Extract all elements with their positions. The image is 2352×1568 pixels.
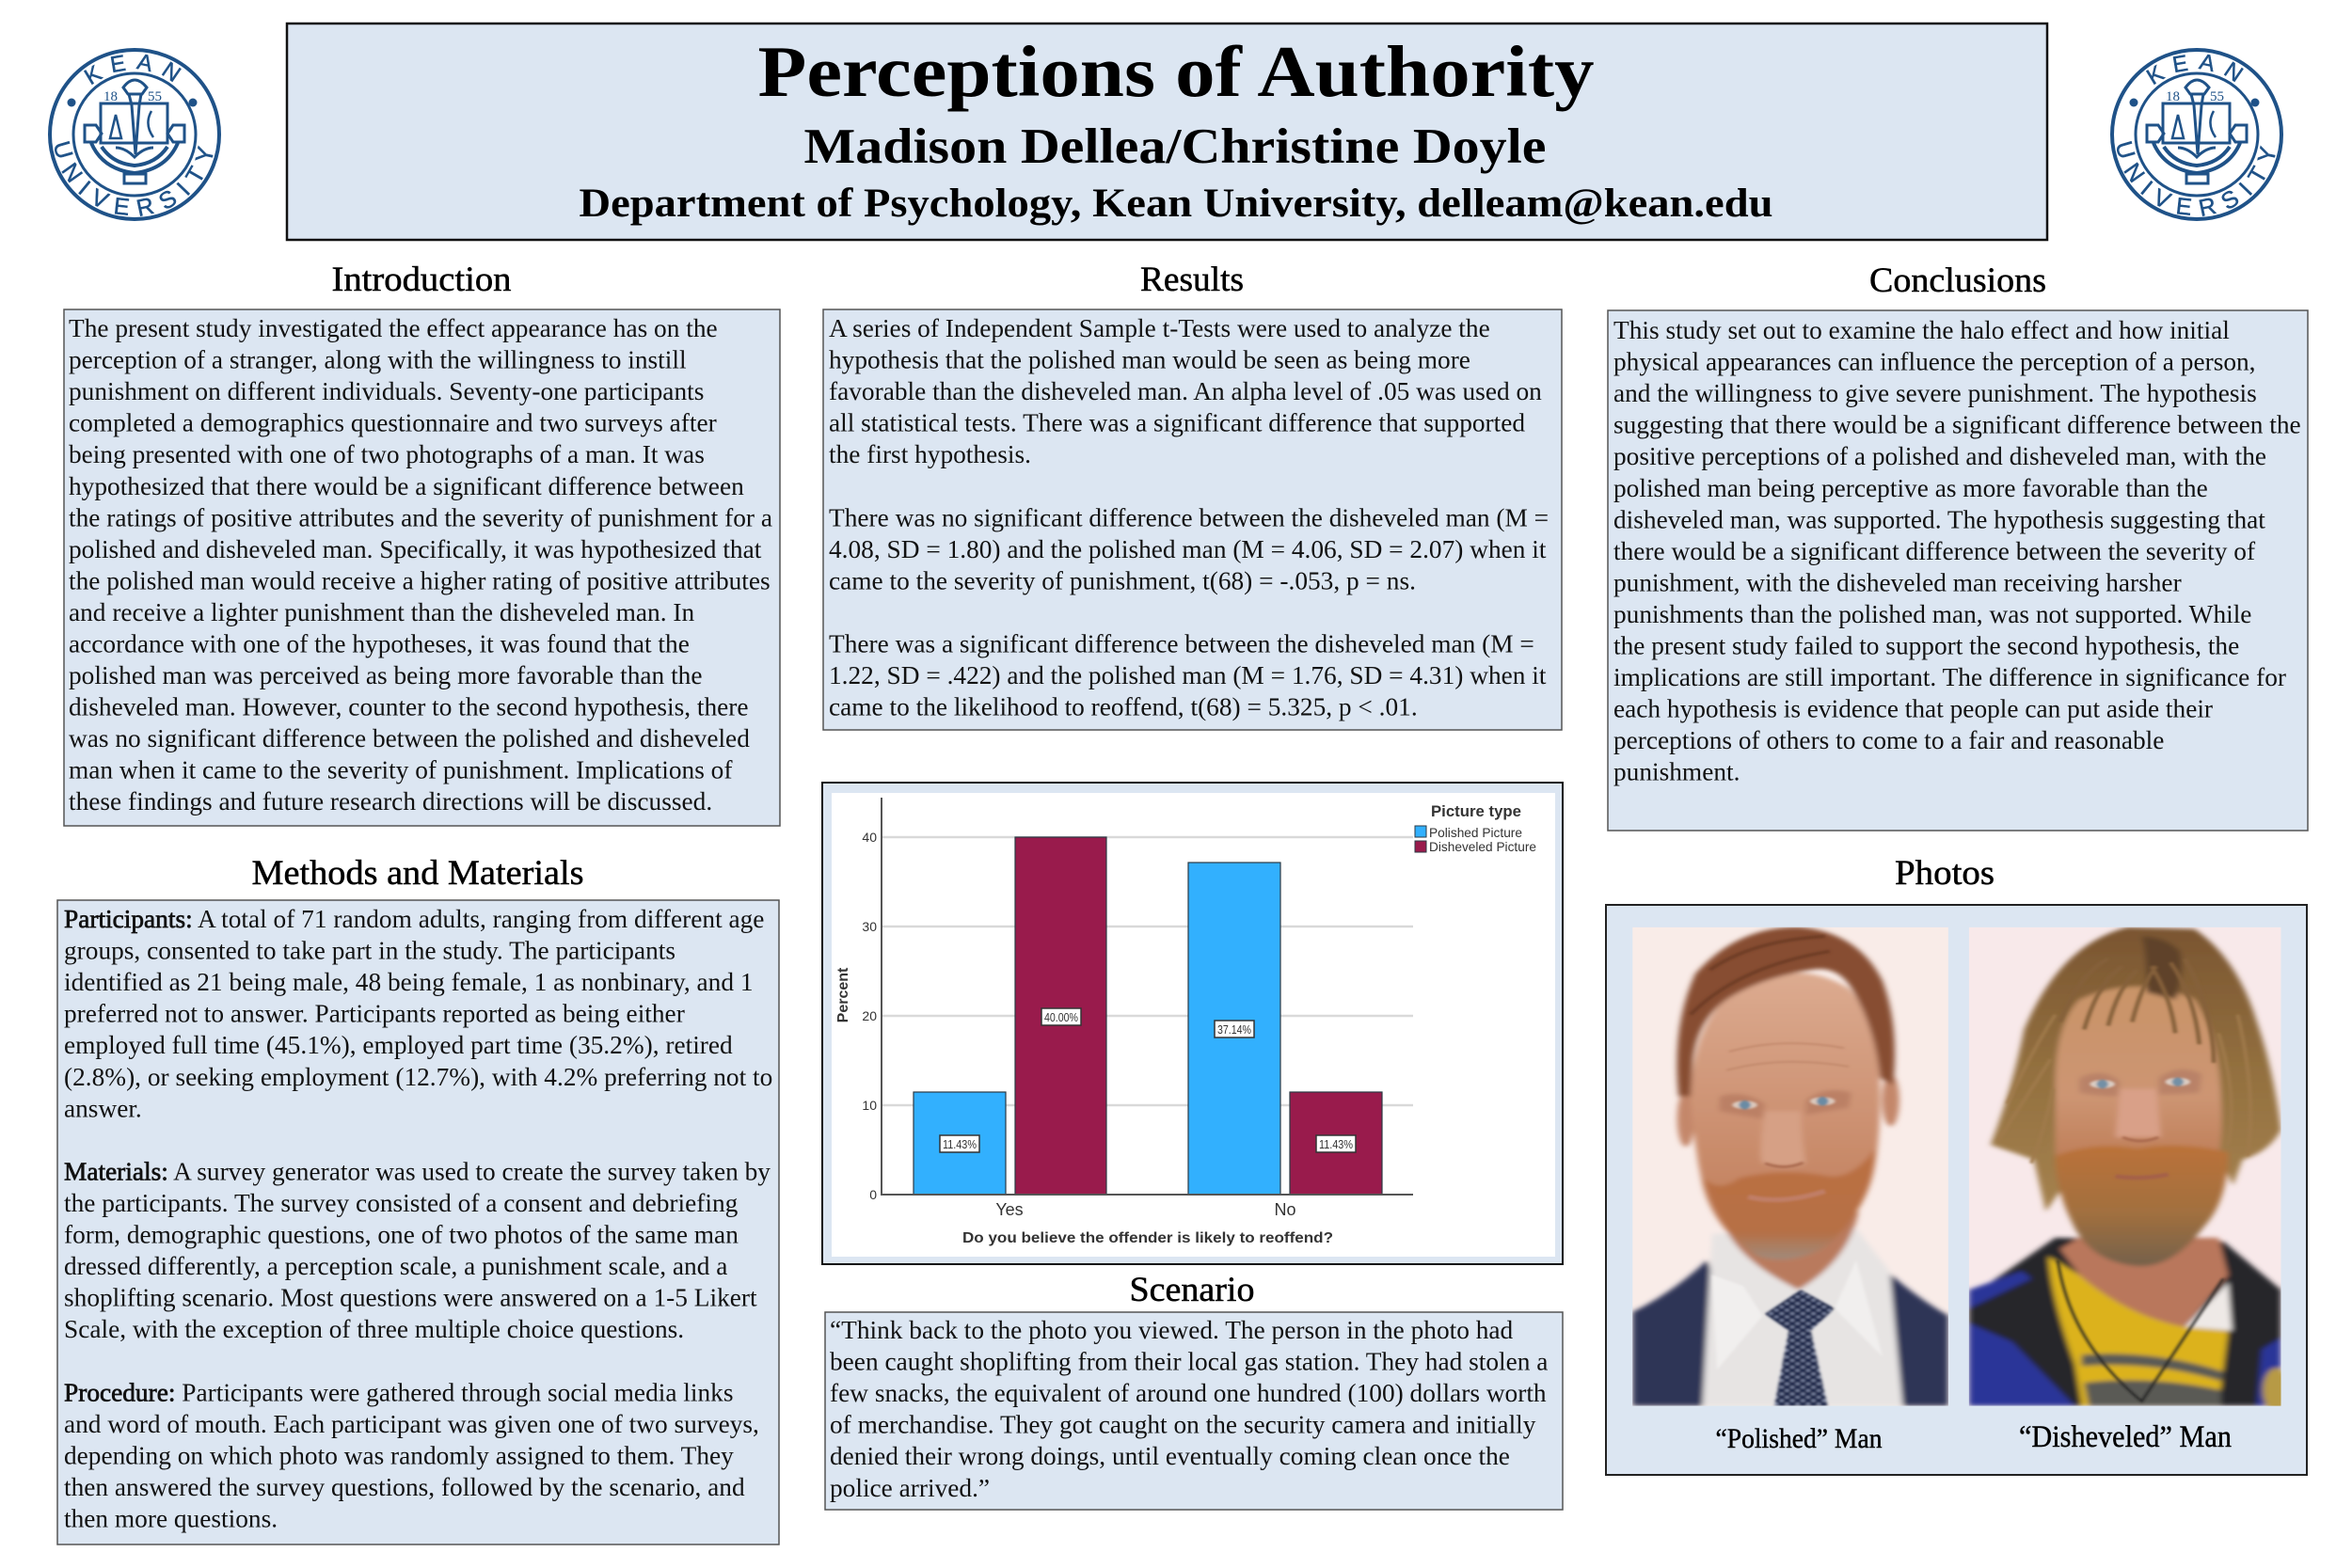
panel: conclusions: punishments than the polished man, was not supported. While: [1613, 600, 2251, 628]
y-axis ticks: [862, 830, 877, 1202]
panel: methods and materials: shoplifting scenario. Most questions were answered on a 1-5 Likert: [64, 1284, 757, 1312]
bars: [914, 837, 1382, 1195]
panel: methods and materials: Materials:: [64, 1157, 168, 1185]
logo: Kean University seal, left: 18: [103, 89, 118, 104]
panel: results: came to the likelihood to reoffend, t(68) = 5.325, p < .01.: [829, 693, 1418, 721]
logo: Kean University seal, left: KEAN: [84, 55, 182, 85]
panel: conclusions: there would be a significant difference between the severity of: [1613, 537, 2256, 565]
panel: conclusions: the present study failed to support the second hypothesis, the: [1613, 632, 2239, 660]
panel: scenario: “Think back to the photo you viewed. The person in the photo had: [830, 1316, 1514, 1344]
panel: conclusions: perceptions of others to come to a fair and reasonable: [1613, 726, 2164, 754]
panel: conclusions: polished man being perceptive as more favorable than the: [1613, 474, 2208, 502]
panel: methods and materials: Procedure:: [64, 1378, 175, 1406]
panel: methods and materials: groups, consented to take part in the study. The participants: [64, 937, 675, 965]
logo: Kean University seal, right: UNIVERSITY: [2117, 141, 2275, 216]
panel: introduction: polished and disheveled man. Specifically, it was hypothesized that: [69, 535, 762, 563]
panel: introduction: [64, 309, 780, 826]
panel: results: 1.22, SD = .422) and the polished man (M = 1.76, SD = 4.31) when it: [829, 661, 1547, 689]
panel: conclusions: This study set out to examine the halo effect and how initial: [1613, 316, 2230, 344]
title: Perceptions of Authority: [758, 31, 1594, 112]
panel: methods and materials: form, demographic questions, one of two photos of the same man: [64, 1221, 739, 1249]
panel: scenario: few snacks, the equivalent of around one hundred (100) dollars worth: [830, 1379, 1547, 1407]
legend: [1415, 802, 1536, 854]
panel: conclusions: suggesting that there would be a significant difference between the: [1613, 411, 2301, 439]
panel: methods and materials: dressed differently, a perception scale, a punishment scale, and a: [64, 1252, 727, 1280]
panel: introduction: the polished man would receive a higher rating of positive attributes: [69, 566, 771, 594]
panel: introduction: man when it came to the severity of punishment. Implications of: [69, 756, 733, 784]
header panel: [287, 24, 2047, 240]
panel: introduction: perception of a stranger, along with the willingness to instill: [69, 346, 687, 374]
panel: results: the first hypothesis.: [829, 440, 1031, 468]
panel: conclusions: positive perceptions of a polished and disheveled man, with the: [1613, 442, 2266, 470]
heading: Methods and Materials: Methods and Materials: [252, 854, 583, 893]
category labels: No: [1274, 1200, 1296, 1219]
logo: Kean University seal, right: 18: [2166, 89, 2180, 104]
panel: methods and materials: then more questions.: [64, 1504, 278, 1532]
heading: Introduction: Introduction: [331, 261, 512, 299]
panel: introduction: The present study investigated the effect appearance has on the: [69, 314, 718, 342]
heading: Results: Results: [1140, 261, 1244, 299]
value labels: 37.14%: [1217, 1022, 1251, 1037]
panel: scenario: of merchandise. They got caught on the security camera and initially: [830, 1411, 1536, 1439]
panel: results: favorable than the disheveled man. An alpha level of .05 was used on: [829, 377, 1542, 405]
panel: introduction: was no significant difference between the polished and disheveled: [69, 724, 750, 752]
panel: scenario: police arrived.”: [830, 1474, 990, 1502]
panel: results: A series of Independent Sample t-Tests were used to analyze the: [829, 314, 1490, 342]
panel: results: There was no significant difference between the disheveled man (M =: [829, 503, 1549, 531]
panel: results: 4.08, SD = 1.80) and the polished man (M = 4.06, SD = 2.07) when it: [829, 535, 1547, 563]
category labels: [995, 1200, 1296, 1219]
panel: photos: [1606, 905, 2307, 1475]
panel: methods and materials: Scale, with the exception of three multiple choice questions.: [64, 1315, 684, 1343]
panel: methods and materials: [57, 900, 779, 1544]
x-axis title: Do you believe the offender is likely to reoffend?: [962, 1230, 1333, 1246]
y-axis ticks: 30: [862, 919, 877, 934]
caption: disheveled man: “Disheveled” Man: [2019, 1420, 2232, 1454]
panel: introduction: the ratings of positive attributes and the severity of punishment for a: [69, 503, 772, 531]
photo: polished man: [1632, 927, 1948, 1406]
panel: results: all statistical tests. There was a significant difference that supported: [829, 409, 1525, 437]
panel: results: [823, 309, 1562, 730]
panel: introduction: these findings and future research directions will be discussed.: [69, 787, 712, 816]
panel: methods and materials: identified as 21 being male, 48 being female, 1 as nonbinary, and 1: [64, 968, 753, 996]
panel: methods and materials: A total of 71 random adults, ranging from different age: [193, 905, 764, 933]
panel: scenario: been caught shoplifting from their local gas station. They had stolen a: [830, 1348, 1548, 1376]
panel: methods and materials: then answered the survey questions, followed by the scenario, and: [64, 1473, 745, 1501]
panel: conclusions: punishment.: [1613, 758, 1740, 786]
logo: Kean University seal, left: 55: [148, 89, 162, 104]
logo: Kean University seal, right: 55: [2210, 89, 2224, 104]
heading: Conclusions: Conclusions: [1869, 261, 2046, 300]
panel: conclusions: implications are still important. The difference in significance for: [1613, 663, 2286, 691]
gridlines: [882, 837, 1413, 1105]
y-axis ticks: 0: [869, 1187, 877, 1202]
panel: methods and materials: Participants were gathered through social media links: [175, 1378, 733, 1406]
panel: introduction: being presented with one of two photographs of a man. It was: [69, 440, 705, 468]
panel: results: came to the severity of punishment, t(68) = -.053, p = ns.: [829, 566, 1416, 594]
panel: introduction: polished man was perceived as being more favorable than the: [69, 661, 702, 689]
panel: introduction: completed a demographics questionnaire and two surveys after: [69, 409, 717, 437]
panel: introduction: disheveled man. However, counter to the second hypothesis, there: [69, 693, 749, 721]
panel: bar chart: [822, 783, 1563, 1264]
panel: introduction: hypothesized that there would be a significant difference between: [69, 472, 744, 500]
panel: introduction: and receive a lighter punishment than the disheveled man. In: [69, 598, 694, 626]
panel: methods and materials: preferred not to answer. Participants reported as being either: [64, 1000, 685, 1028]
legend: Polished Picture: [1429, 825, 1522, 840]
panel: methods and materials: Participants:: [64, 905, 193, 933]
department and contact: Department of Psychology, Kean University, delleam@kean.edu: [580, 182, 1772, 226]
panel: scenario: [825, 1312, 1563, 1510]
authors: Madison Dellea/Christine Doyle: [803, 119, 1547, 174]
panel: conclusions: punishment, with the disheveled man receiving harsher: [1613, 568, 2182, 596]
panel: conclusions: each hypothesis is evidence that people can put aside their: [1613, 695, 2213, 723]
panel: methods and materials: (2.8%), or seeking employment (12.7%), with 4.2% preferring not to: [64, 1063, 772, 1091]
panel: results: hypothesis that the polished man would be seen as being more: [829, 346, 1470, 374]
legend: Picture type: [1431, 802, 1521, 820]
logo: Kean University seal, right: [2110, 48, 2283, 221]
value labels: 40.00%: [1044, 1010, 1078, 1024]
panel: introduction: punishment on different individuals. Seventy-one participants: [69, 377, 704, 405]
value labels: [940, 1008, 1356, 1152]
y-axis ticks: 10: [862, 1098, 877, 1113]
panel: conclusions: physical appearances can influence the perception of a person,: [1613, 348, 2256, 376]
y-axis ticks: 20: [862, 1008, 877, 1023]
logo: Kean University seal, left: [48, 48, 221, 221]
caption: polished man: “Polished” Man: [1716, 1423, 1882, 1454]
panel: scenario: denied their wrong doings, until eventually coming clean once the: [830, 1442, 1510, 1470]
panel: methods and materials: the participants. The survey consisted of a consent and debriefing: [64, 1189, 739, 1217]
logo: Kean University seal, left: UNIVERSITY: [55, 141, 213, 216]
photo: disheveled man: [1969, 927, 2290, 1413]
panel: conclusions: and the willingness to give severe punishment. The hypothesis: [1613, 379, 2257, 407]
category labels: Yes: [995, 1200, 1024, 1219]
panel: methods and materials: employed full time (45.1%), employed part time (35.2%), retired: [64, 1031, 733, 1059]
panel: conclusions: [1608, 310, 2308, 831]
logo: Kean University seal, right: KEAN: [2146, 55, 2244, 85]
panel: methods and materials: answer.: [64, 1094, 142, 1122]
axes: [882, 798, 1413, 1195]
value labels: 11.43%: [1319, 1137, 1353, 1151]
panel: methods and materials: A survey generator was used to create the survey taken by: [168, 1157, 771, 1185]
heading: Photos: Photos: [1895, 854, 1994, 893]
legend: Disheveled Picture: [1429, 839, 1536, 854]
panel: methods and materials: and word of mouth. Each participant was given one of two surveys,: [64, 1410, 759, 1438]
panel: conclusions: disheveled man, was supported. The hypothesis suggesting that: [1613, 505, 2265, 533]
panel: introduction: accordance with one of the hypotheses, it was found that the: [69, 630, 690, 658]
y-axis ticks: 40: [862, 830, 877, 845]
panel: results: There was a significant difference between the disheveled man (M =: [829, 630, 1534, 658]
heading: Scenario: Scenario: [1129, 1271, 1255, 1309]
value labels: 11.43%: [943, 1137, 977, 1151]
y-axis title: Percent: [835, 967, 851, 1022]
panel: methods and materials: depending on which photo was randomly assigned to them. They: [64, 1441, 734, 1469]
